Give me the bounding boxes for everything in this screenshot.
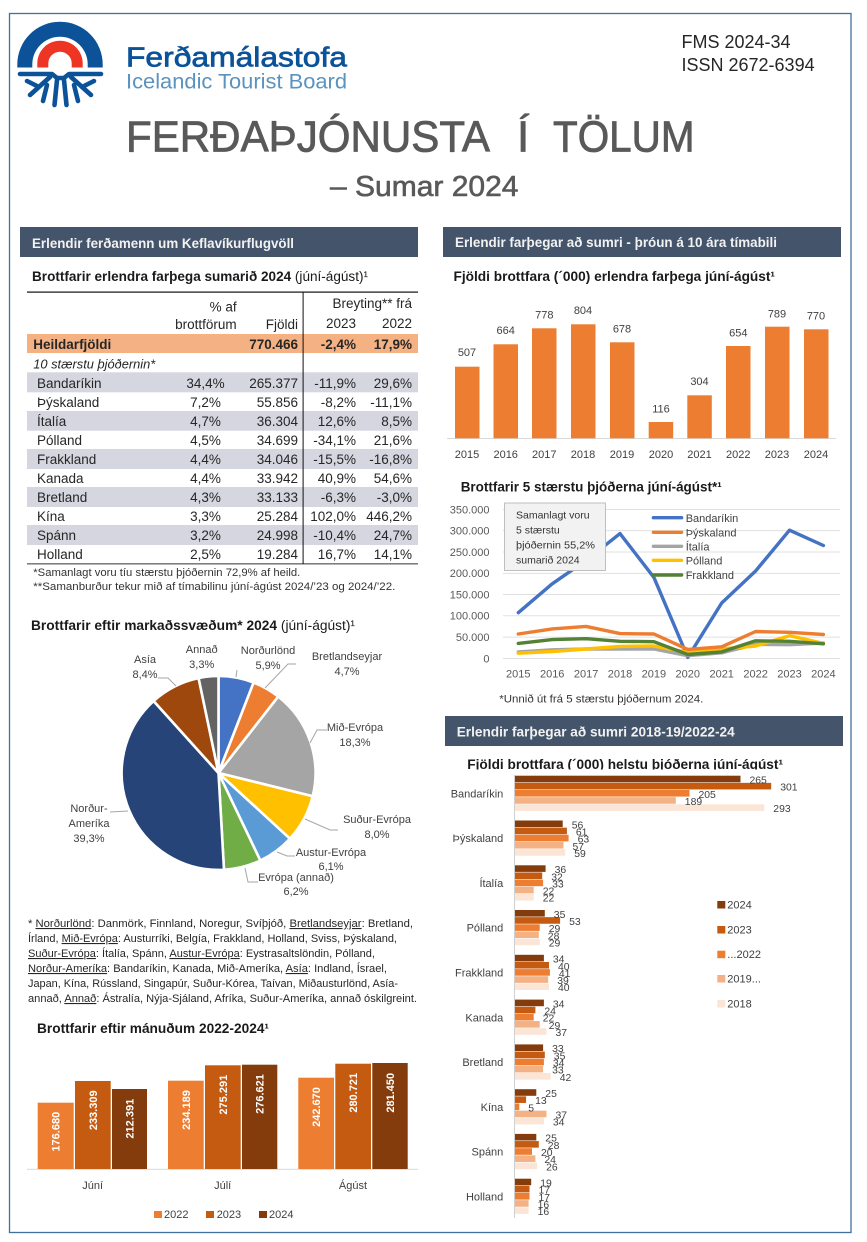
group: Ítalía [479,865,566,905]
group: Bandaríkin: 205 [698,790,716,801]
group: Kanada [465,999,567,1039]
value labels: 804 [574,305,592,317]
group: Kanada: 29 [549,1021,560,1032]
group: Pólland: 28 [548,931,560,942]
line: Þýskaland [518,626,823,649]
pie chart: market regions [69,644,412,898]
group: Holland: 17 [538,1193,550,1204]
text block: region definitions: Suður-Evrópa: Ítalía, Spánn, Austur-Evrópa: Eystrasaltslöndin, Pólland, [28,947,375,960]
legend: line chart: Þýskaland [686,527,736,539]
group: Holland: Holland [466,1191,503,1203]
total row: 770.466 [249,337,298,352]
group: Holland: 16 [538,1200,549,1211]
group: Pólland: 29 [549,938,560,949]
group: Ítalía: 22 [543,894,554,905]
group: Bandaríkin: 189 [685,797,702,808]
bars: July [168,1065,277,1169]
subtitle: – Sumar 2024 [330,171,518,203]
x axis labels: 2020 [676,669,700,681]
table column headers: Fjöldi [266,317,298,332]
heading: pie chart: Brottfarir eftir markaðssvæðum* 2024 (júní-ágúst)¹ [31,618,356,633]
group: Spánn [471,1134,560,1173]
pie labels: Bretlandseyjar [312,651,382,663]
bars: July: 275.291 [218,1075,230,1115]
table rows: 4,7% [190,414,221,429]
group: Frakkland [455,955,571,994]
legend: monthly chart [154,1209,293,1221]
callout: top five share [504,503,606,570]
year labels: 2015 [455,449,479,461]
callout: top five share: þjóðernin 55,2% [516,539,595,551]
logo subtitle: Icelandic Tourist Board [126,70,347,93]
table rows: 33.133 [257,490,298,505]
table rows: 34.046 [257,452,298,467]
group: Bandaríkin: 265 [750,776,767,787]
y axis labels: 300.000 [450,526,490,538]
title [126,113,694,162]
year labels: 2016 [493,449,518,461]
subheading: ten largest: 10 stærstu þjóðernin* [33,357,156,371]
table rows: -11,1% [370,395,412,410]
pie labels: Asía [134,654,157,666]
y axis labels: 250.000 [450,547,490,559]
table rows: -11,9% [314,376,356,391]
table footnotes [33,567,395,593]
group: Pólland: 29 [549,924,560,935]
icon: arch and snowflake [17,22,103,105]
group: Pólland: 35 [554,910,566,921]
table rows: Spánn [37,528,76,543]
table rows: 24.998 [257,528,298,543]
pie labels: 4,7% [334,666,360,678]
table rows: 33.942 [257,471,298,486]
table rows: -8,2% [321,395,356,410]
total row: Heildarfjöldi [33,337,111,352]
table rows: 40,9% [318,471,356,486]
legend: nationalities chart: 2019... [727,974,761,986]
group: Þýskaland: 56 [572,820,583,831]
table rows: Pólland [37,433,82,448]
table rows: 12,6% [318,414,356,429]
group: Kanada: 22 [543,1014,554,1025]
group: Kanada: 37 [556,1028,567,1039]
table rows [37,376,412,562]
group: Bandaríkin: Bandaríkin [451,788,503,800]
bars: June: 176.680 [50,1112,62,1152]
year labels: 2018 [571,449,595,461]
bars: July: 234.189 [181,1090,193,1130]
x axis labels: 2022 [743,669,768,681]
group: Kanada: Kanada [465,1012,504,1024]
table rows: -6,3% [321,490,356,505]
heading: table: Brottfarir erlendra farþega sumarið 2024 (júní-ágúst)¹ [32,269,368,284]
text block: region definitions: annað, Annað: Ástralía, Nýja-Sjáland, Afríka, Suður-Ameríka, annað óskilgreint. [28,992,417,1005]
bars: August: 281.450 [385,1073,397,1113]
table rows: 3,2% [190,528,221,543]
table rows: 3,3% [190,509,221,524]
group: Holland [466,1178,552,1218]
x axis labels: 2017 [574,669,598,681]
value labels: 778 [535,310,553,322]
text block: region definitions: * Norðurlönd: Danmörk, Finnland, Noregur, Svíþjóð, Bretlandseyjar: Bretland, [28,918,413,930]
panel: section header 2018-19/2022-24: Erlendir farþegar að sumri 2018-19/2022-24 [457,724,735,740]
legend: nationalities chart: ...2022 [727,949,761,961]
value labels: 116 [652,404,670,416]
x axis labels: 2015 [506,669,531,681]
table: departures by nationality [27,292,418,565]
legend: line chart: Bandaríkin [686,513,738,525]
table rows: -34,1% [313,433,356,448]
year labels: 2023 [765,449,789,461]
bars [455,324,828,438]
group: Spánn: 25 [545,1134,557,1145]
value labels: 304 [690,376,709,388]
value labels: 654 [729,328,747,340]
bars: June [38,1081,147,1169]
legend: nationalities chart: 2018 [727,998,752,1010]
bar chart: departures by month [27,1063,418,1221]
y axis labels: 350.000 [450,504,490,516]
month labels: Júní [82,1180,103,1192]
group: Frakkland: Frakkland [455,967,503,979]
title: TÖLUM [553,113,694,162]
y axis labels: 150.000 [450,589,490,601]
legend: nationalities chart: 2023 [727,924,752,936]
publication identifiers: FMS 2024-34 [682,32,791,52]
x axis labels: 2016 [540,669,564,681]
bar chart: main nationalities by year [451,775,798,1218]
table column headers: 2022 [382,316,412,331]
group: Bandaríkin [451,776,798,815]
callout: top five share: 5 stærstu [516,525,560,537]
group: Bretland: Bretland [462,1057,503,1069]
group: Frakkland: 41 [559,969,571,980]
group: Þýskaland: Þýskaland [453,833,503,845]
pie labels: Suður-Evrópa [343,814,412,826]
table footnotes: *Samanlagt voru tíu stærstu þjóðernin 72,9% af heild. [33,567,300,579]
text block: region definitions: Norður-Ameríka: Bandaríkin, Kanada, Mið-Ameríka, Asía: Indland, Ísrael, [28,962,387,975]
pie labels: Austur-Evrópa [296,847,367,859]
x axis labels: 2024 [811,669,836,681]
group: Bretland: 33 [552,1066,564,1077]
line: Frakkland [518,639,823,654]
group: Bandaríkin: 293 [773,804,791,815]
group: Þýskaland [453,820,589,860]
pie labels: Mið-Evrópa [327,722,384,734]
group: Þýskaland: 59 [574,849,586,860]
heading: 10-year bar chart: Fjöldi brottfara (´000) erlendra farþega júní-ágúst¹ [454,269,776,284]
callout: top five share: Samanlagt voru [516,510,590,522]
group: Ítalía: 32 [551,872,563,883]
group: Bretland [462,1044,571,1084]
group: Pólland: 53 [569,917,581,928]
table rows: -3,0% [377,490,412,505]
table rows: 8,5% [381,414,412,429]
group: Kína: 34 [553,1118,565,1129]
month labels: Ágúst [339,1179,367,1192]
group: Holland: 17 [538,1186,550,1197]
year labels: 2022 [726,449,751,461]
bar chart: departures 2015-2024 [447,305,836,461]
table rows: 14,1% [374,547,412,562]
panel: section header Keflavík [20,227,418,257]
table rows: 7,2% [190,395,221,410]
group: Holland: 16 [538,1207,549,1218]
group: Ítalía: 22 [543,887,554,898]
publication identifiers: ISSN 2672-6394 [682,55,815,75]
bars: August [298,1063,408,1169]
legend: nationalities chart [717,900,761,1010]
table footnotes: **Samanburður tekur mið af tímabilinu júní-ágúst 2024/’23 og 2024/’22. [33,581,395,593]
year labels: 2024 [804,449,828,461]
x axis labels: 2018 [608,669,632,681]
x axis labels: 2021 [709,669,734,681]
bars: July: 276.621 [255,1074,267,1114]
group: Þýskaland: 61 [576,828,588,838]
line chart footnote: *Unnið út frá 5 stærstu þjóðernum 2024. [499,694,703,706]
title: Í [517,113,530,162]
bars: August: 280.721 [348,1073,360,1113]
bars: August: 242.670 [311,1087,323,1127]
table rows: 19.284 [257,547,298,562]
table rows: Ítalía [37,414,67,429]
month labels: Júlí [214,1180,231,1192]
group: Frakkland: 40 [558,983,570,994]
total row: 17,9% [374,337,412,352]
table rows: 55.856 [257,395,298,410]
pie labels: 8,0% [364,829,390,841]
group: Ítalía: Ítalía [479,877,504,890]
legend: line chart: Frakkland [686,570,734,582]
year labels: 2019 [610,449,634,461]
heading: line chart: Brottfarir 5 stærstu þjóðerna júní-ágúst*¹ [461,480,722,495]
text block: region definitions [28,918,417,1005]
table rows: -10,4% [313,528,356,543]
x axis labels: 2019 [642,669,666,681]
pie leader lines [110,664,338,882]
group: Kína: 13 [535,1096,547,1107]
line: Bandaríkin [518,530,823,657]
month labels [82,1179,367,1192]
group: Kanada: 24 [544,1007,556,1018]
table rows: 446,2% [366,509,412,524]
pie slices [122,676,316,870]
pie labels: 6,1% [318,861,344,873]
table rows: Þýskaland [37,395,99,410]
group: Kína: 25 [545,1089,557,1100]
table rows: -15,5% [313,452,356,467]
pie labels: 3,3% [189,659,214,671]
bars: June: 212.391 [124,1099,136,1139]
x axis labels: 2023 [777,669,802,681]
pie labels: Norður- [70,803,108,815]
table rows: -16,8% [369,452,412,467]
bars: June: 233.309 [88,1090,100,1130]
pie labels: 18,3% [339,737,371,749]
total row [33,337,412,352]
text block: region definitions: Írland, Mið-Evrópa: Austurríki, Belgía, Frakkland, Holland, Sviss, Þýskaland, [28,932,397,945]
y axis labels: 50.000 [456,632,490,644]
logo: Ferðamálastofa [17,22,347,105]
year labels: 2017 [532,449,557,461]
pie labels: Evrópa (annað) [258,872,334,884]
group: Bretland: 35 [554,1051,566,1062]
pie labels [69,644,412,898]
legend: monthly chart: 2024 [269,1209,293,1221]
publication identifiers [682,32,815,75]
panel: section header 10-year trend [443,227,841,257]
total row: -2,4% [321,337,356,352]
group: Frakkland: 39 [557,976,569,987]
group: Pólland [467,910,581,949]
group: Holland: 19 [540,1178,552,1189]
group: Bretland: 42 [560,1073,571,1084]
group: Spánn: 28 [548,1141,560,1152]
table rows: 4,5% [190,433,221,448]
line chart: five largest nationalities [450,503,840,681]
table rows: 54,6% [374,471,412,486]
group: Spánn: Spánn [471,1147,503,1159]
value labels: 770 [807,310,825,322]
line: Pólland [518,636,823,653]
legend: line chart: Pólland [686,556,722,568]
group: Ítalía: 33 [552,879,564,890]
value labels [458,305,825,416]
table rows: 265.377 [249,376,298,391]
group: Bretland: 34 [553,1059,565,1070]
table rows: 4,4% [190,452,221,467]
table column headers: % af [210,300,237,315]
heading: monthly chart: Brottfarir eftir mánuðum 2022-2024¹ [37,1021,269,1036]
table rows: 2,5% [190,547,221,562]
legend: monthly chart: 2022 [164,1209,188,1221]
table rows: 16,7% [318,547,356,562]
table rows: Kína [37,509,65,524]
group: Pólland: Pólland [467,923,503,935]
callout: top five share: sumarið 2024 [516,554,580,566]
pie labels: 39,3% [73,833,105,845]
year labels: 2021 [687,449,712,461]
title: FERÐAÞJÓNUSTA [126,113,491,162]
table rows: 25.284 [257,509,298,524]
pie labels: 8,4% [132,669,158,681]
group: Frakkland: 40 [558,962,570,973]
pie labels: 5,9% [255,660,281,672]
y axis labels: 0 [483,653,490,665]
table rows: Holland [37,547,83,562]
pie labels: Ameríka [69,818,110,830]
legend: line chart: Ítalía [686,540,710,554]
y axis labels [450,504,490,665]
group: Spánn: 24 [544,1155,556,1166]
table rows: 21,6% [374,433,412,448]
group: Kína [481,1089,567,1129]
year labels [455,449,828,461]
legend: monthly chart: 2023 [217,1209,241,1221]
legend: nationalities chart: 2024 [727,900,752,912]
table rows: Bretland [37,490,87,505]
logo name: Ferðamálastofa [126,42,347,73]
x axis labels [506,669,836,681]
group: Bandaríkin: 301 [780,783,798,794]
group: Bretland: 33 [552,1044,564,1055]
pie labels: 6,2% [283,886,309,898]
group: Kína: 5 [528,1103,534,1114]
group: Kanada: 34 [553,999,565,1010]
table column headers [175,296,412,332]
panel: section header Keflavík: Erlendir ferðamenn um Keflavíkurflugvöll [32,235,294,251]
y axis labels: 100.000 [450,611,490,623]
table rows: 4,3% [190,490,221,505]
table rows: 34,4% [186,376,225,391]
value labels: 678 [613,324,631,336]
pie labels: Norðurlönd [241,645,295,657]
group: Frakkland: 34 [553,955,565,966]
table column headers: 2023 [326,316,356,331]
table rows: Bandaríkin [37,376,102,391]
group: Ítalía: 36 [555,865,566,876]
table column headers: brottförum [175,317,237,332]
table rows: Frakkland [37,452,96,467]
table rows: Kanada [37,471,84,486]
value labels: 507 [458,347,476,359]
table rows: 24,7% [374,528,412,543]
group: Kína: 37 [556,1110,567,1121]
group: Þýskaland: 57 [572,842,584,853]
table column headers: Breyting** frá [332,296,412,311]
group: Kína: Kína [481,1102,504,1114]
legend: line chart [652,513,738,582]
heading: nationalities bar chart: Fjöldi brottfara (´000) helstu þjóðerna júní-ágúst¹ [467,757,784,772]
y axis labels: 200.000 [450,568,490,580]
table rows: 34.699 [257,433,298,448]
panel: section header 10-year trend: Erlendir farþegar að sumri - þróun á 10 ára tímabili [455,234,777,250]
table rows: 102,0% [310,509,356,524]
value labels: 789 [768,309,786,321]
text block: region definitions: Japan, Kína, Rússland, Singapúr, Suður-Kórea, Taívan, Miðausturlönd, Asía- [28,978,398,990]
line: Ítalía [518,643,823,656]
value labels: 664 [497,325,515,337]
table rows: 4,4% [190,471,221,486]
panel: section header 2018-19/2022-24 [445,716,843,746]
table rows: 36.304 [257,414,298,429]
year labels: 2020 [649,449,673,461]
group: Spánn: 20 [541,1148,553,1159]
group: Þýskaland: 63 [578,835,589,846]
pie labels: Annað [186,644,218,656]
table rows: 29,6% [374,376,412,391]
group: Spánn: 26 [546,1162,558,1173]
